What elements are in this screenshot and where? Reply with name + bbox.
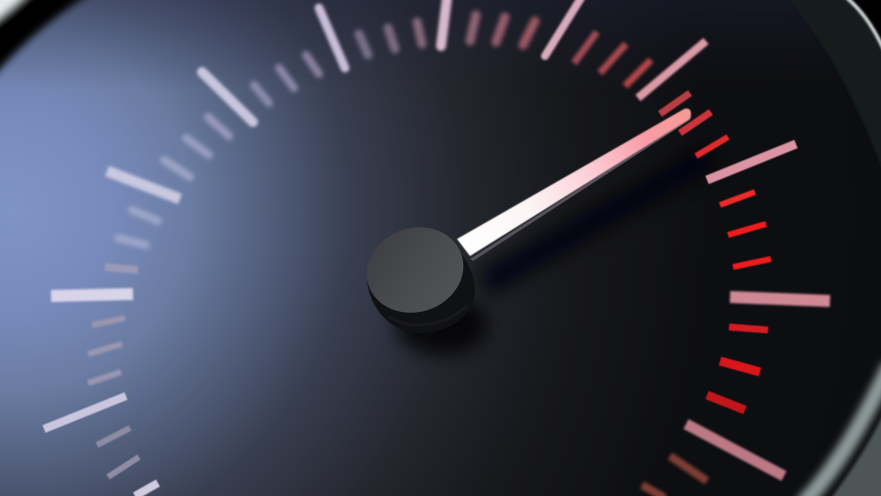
minor ticks, left-centre blurred xyxy=(88,267,138,383)
blurred red ticks, bottom xyxy=(642,456,707,496)
bezel: top-left rim xyxy=(0,0,95,80)
needle side edge xyxy=(470,116,692,261)
hub xyxy=(355,215,488,355)
minor ticks, top blurred xyxy=(359,15,535,55)
needle xyxy=(457,109,692,261)
hub cap xyxy=(355,215,475,325)
minor ticks, upper-left blurred xyxy=(118,55,319,245)
hub shadow xyxy=(396,295,488,355)
needle shadow xyxy=(478,146,716,296)
red ticks xyxy=(660,93,771,410)
needle top face xyxy=(457,109,691,256)
bezel: bottom-right rim xyxy=(802,365,881,496)
bezel: top-right rim xyxy=(785,0,881,190)
minor ticks, upper-right fading red xyxy=(574,32,651,86)
hub side wall xyxy=(367,228,475,333)
minor ticks, left side xyxy=(97,428,158,496)
